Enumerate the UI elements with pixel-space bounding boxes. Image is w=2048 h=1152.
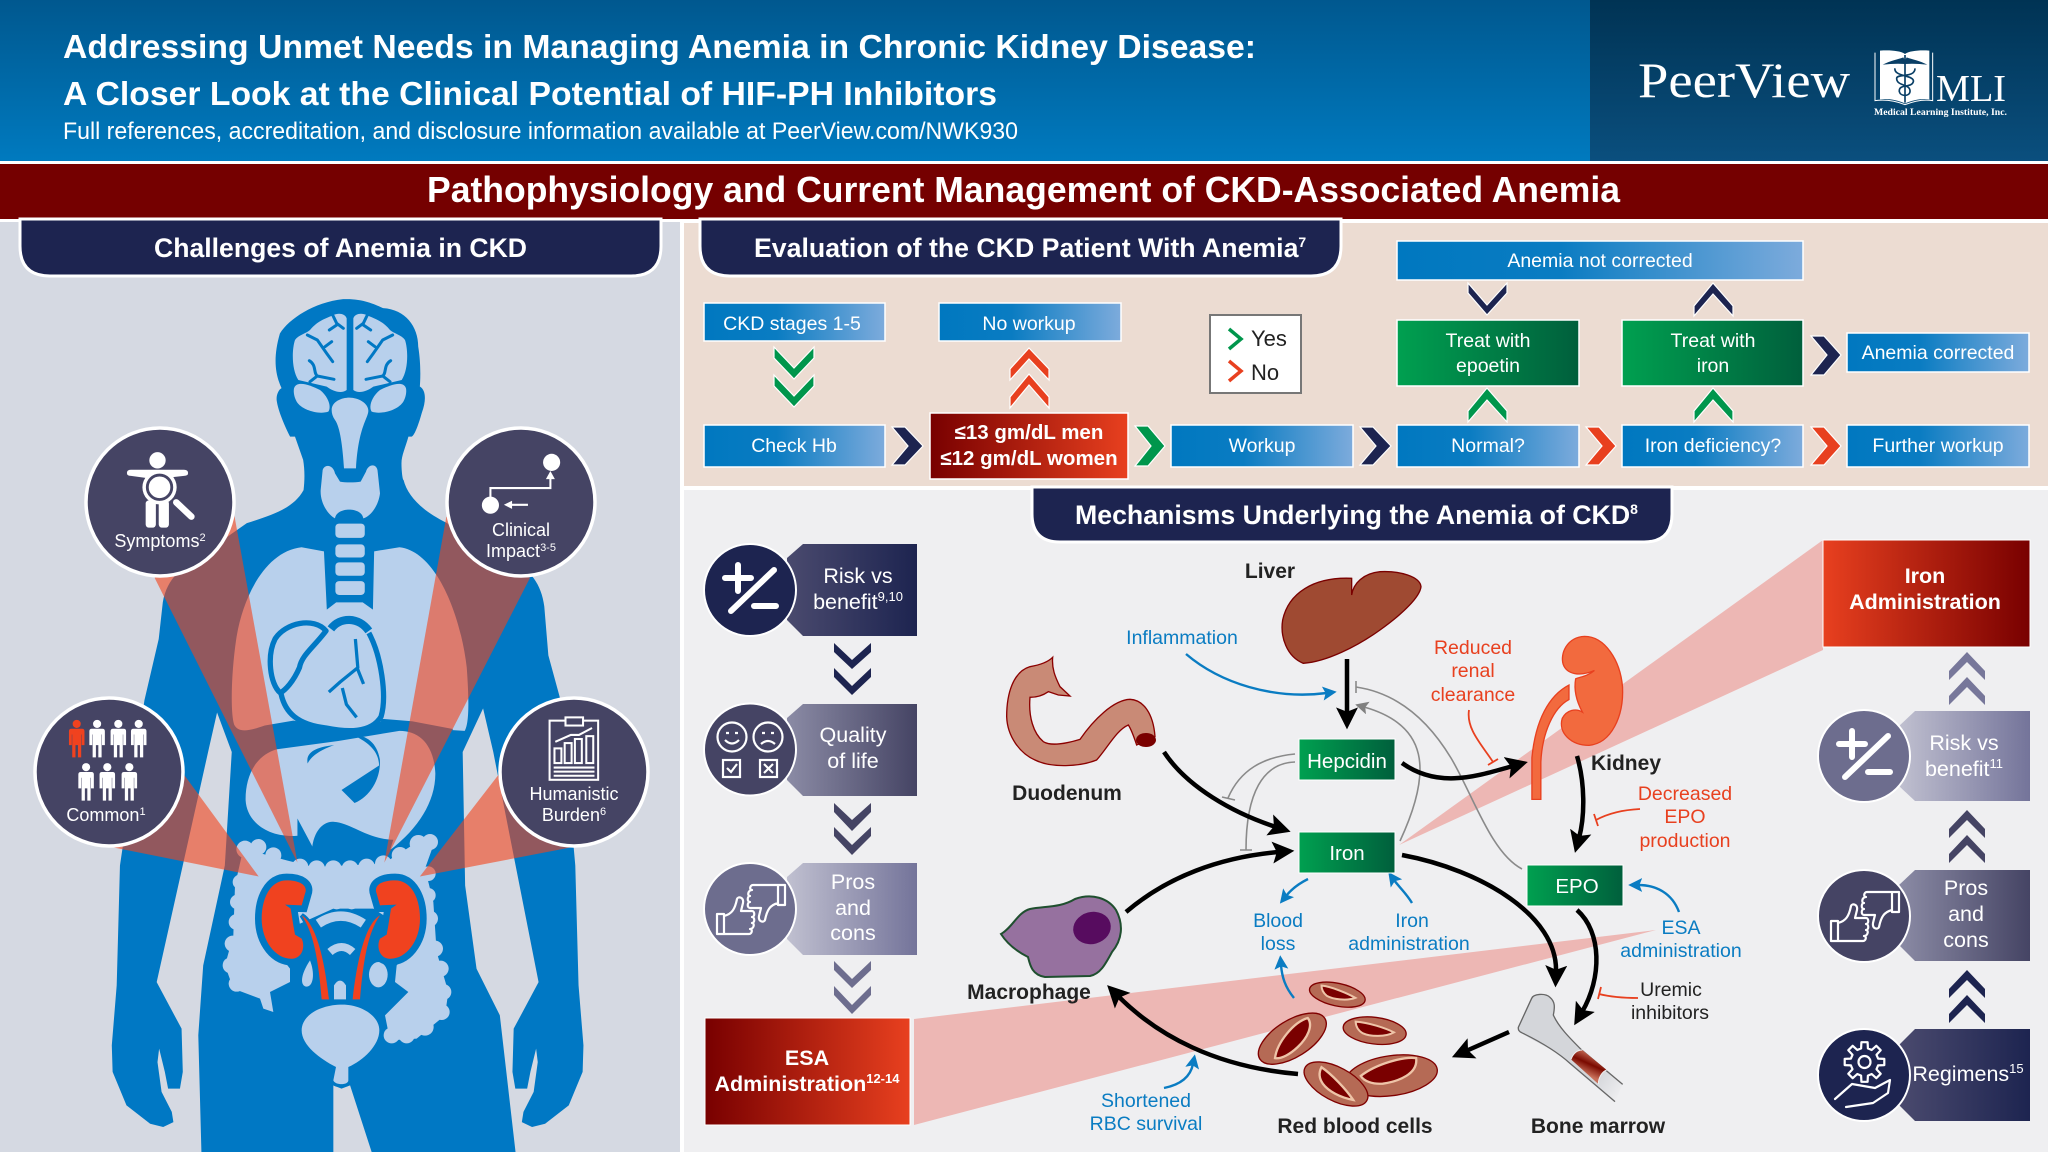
tag: regimens: 15 [2009, 1061, 2024, 1076]
box: CKD stages: CKD stages 1-5 [723, 313, 861, 335]
box: check Hb: Check Hb [751, 435, 837, 457]
box: anemia corrected: Anemia corrected [1862, 342, 2014, 364]
label: kidney: Kidney [1591, 752, 1661, 775]
tag: risk vs benefit [1899, 711, 2030, 801]
band: ESA administration [914, 930, 1656, 1125]
tag: risk vs benefit: Risk vs [823, 564, 893, 588]
heading: mechanisms: 8 [1630, 501, 1638, 517]
arrows: black pathways [1118, 659, 1596, 1074]
label: red blood cells: Red blood cells [1277, 1115, 1433, 1138]
section banner [0, 164, 2048, 219]
icon: gear and hand [1818, 1029, 1910, 1121]
box: iron deficiency [1622, 425, 1803, 467]
box: check Hb [704, 425, 885, 467]
box: workup [1171, 425, 1353, 467]
tag: regimens: Regimens [1912, 1062, 2009, 1086]
label: inflammation: Inflammation [1126, 627, 1238, 649]
arrow: chevrons [1949, 652, 1985, 705]
column: iron considerations [1818, 540, 2030, 1121]
label: Common [66, 805, 139, 825]
heading: evaluation: Evaluation of the CKD Patient With Anemia [754, 233, 1298, 263]
label: iron administration [1348, 910, 1470, 955]
heading: evaluation [700, 219, 1341, 276]
label: shortened RBC survival: RBC survival [1090, 1113, 1202, 1135]
box: iron administration [1823, 540, 2030, 647]
panel: evaluation background [684, 223, 2048, 486]
heading: mechanisms [1032, 487, 1672, 542]
body silhouette [112, 299, 583, 1152]
callout: humanistic burden: 6 [600, 806, 606, 818]
legend: yes and no [1210, 315, 1301, 393]
callout wedges to kidneys [112, 515, 577, 876]
red blood cells [1250, 978, 1440, 1115]
arrow: chevrons [834, 803, 871, 855]
label: macrophage: Macrophage [967, 981, 1091, 1004]
panel: challenges background [0, 222, 680, 1152]
label: bone marrow: Bone marrow [1531, 1115, 1666, 1138]
icon: thumbs [704, 863, 796, 955]
label: uremic inhibitors: inhibitors [1631, 1002, 1709, 1024]
label: ESA administration [1620, 917, 1742, 962]
box: anemia not corrected: Anemia not corrected [1507, 250, 1693, 272]
section title: Pathophysiology and Current Management of CKD-Associated Anemia [427, 169, 1621, 210]
box: anemia not corrected [1397, 241, 1803, 280]
box: CKD stages [704, 303, 885, 341]
tag: pros and cons: and [835, 896, 871, 920]
tag: pros and cons: and [1948, 902, 1984, 926]
left kidney [262, 880, 329, 999]
icon: pathway [482, 454, 560, 514]
tag: pros and cons [787, 863, 917, 955]
callout: humanistic burden [500, 698, 648, 846]
diagram: iron regulation [967, 560, 1742, 1138]
heading: evaluation: 7 [1298, 234, 1306, 250]
bone marrow [1518, 994, 1623, 1102]
tag: risk vs benefit: 11 [1990, 756, 2003, 771]
tag: quality of life [787, 704, 917, 796]
heading: mechanisms: Mechanisms Underlying the Anemia of CKD [1075, 500, 1630, 530]
header banner [0, 0, 2048, 161]
label: ESA administration: administration [1620, 940, 1742, 962]
box: treat with epoetin [1397, 320, 1579, 386]
band: iron administration [1399, 540, 1823, 845]
box: iron [1299, 832, 1395, 873]
inhibition lines: red [1469, 710, 1640, 999]
box: EPO: EPO [1555, 875, 1599, 898]
arrow: chevrons [834, 961, 871, 1014]
box: iron administration: Iron [1905, 564, 1945, 588]
label: shortened RBC survival: Shortened [1101, 1090, 1191, 1112]
lungs [232, 547, 468, 732]
organ: liver [1282, 572, 1421, 663]
label: reduced renal clearance: clearance [1431, 684, 1515, 706]
icon: plus minus [1818, 710, 1910, 802]
intestines and kidneys [223, 834, 451, 1084]
box: treat with iron: iron [1697, 355, 1729, 377]
tag: risk vs benefit: 9,10 [878, 589, 903, 604]
icon: thumbs [1818, 870, 1910, 962]
tag: pros and cons: cons [1943, 928, 1989, 952]
label: Humanistic [529, 784, 619, 804]
arrow: chevrons [1949, 970, 1985, 1023]
arrows: flow chevrons [774, 283, 1841, 466]
callout: humanistic burden: Burden [542, 805, 600, 825]
legend: yes and no: No [1251, 360, 1279, 385]
box: no workup [939, 303, 1121, 341]
box: treat with epoetin: epoetin [1456, 355, 1520, 377]
label: decreased EPO production [1638, 783, 1732, 852]
label: ESA administration: ESA [1661, 917, 1701, 939]
panel: mechanisms background [684, 490, 2048, 1152]
label: uremic inhibitors: Uremic [1640, 979, 1702, 1001]
icon: faces and checkboxes [704, 704, 796, 796]
box: EPO [1527, 865, 1623, 906]
flowchart: evaluation [704, 241, 2029, 479]
column: ESA considerations [704, 544, 917, 1125]
figure: body with organs [112, 299, 583, 1152]
legend: yes and no: Yes [1251, 326, 1287, 351]
box: no workup: No workup [982, 313, 1076, 335]
tag: regimens [1899, 1029, 2030, 1121]
box: ESA administration: 12-14 [866, 1071, 900, 1086]
heart [270, 620, 452, 731]
MLI logo book [1875, 50, 1933, 105]
callout: clinical impact: 3-5 [540, 542, 556, 554]
MLI tagline: Medical Learning Institute, Inc. [1874, 108, 2007, 118]
arrow: chevrons [834, 643, 871, 695]
box: workup: Workup [1229, 435, 1296, 457]
box: ESA administration: Administration [715, 1072, 866, 1096]
label: shortened RBC survival [1090, 1090, 1202, 1135]
box: anemia corrected [1847, 333, 2029, 372]
inhibition lines: gray [1222, 681, 1522, 869]
box: further workup: Further workup [1872, 435, 2004, 457]
label: iron administration: Iron [1395, 910, 1429, 932]
label: decreased EPO production: EPO [1664, 806, 1706, 828]
icon: plus minus [704, 544, 796, 636]
PeerView logo: PeerView [1638, 52, 1850, 108]
label: duodenum: Duodenum [1012, 782, 1122, 805]
tag: pros and cons [1899, 870, 2030, 961]
label: blood loss: loss [1261, 933, 1296, 955]
tag: risk vs benefit: Risk vs [1929, 731, 1999, 755]
title line 2: A Closer Look at the Clinical Potential of HIF-PH Inhibitors [63, 75, 997, 112]
box: ESA administration: ESA [785, 1046, 829, 1070]
right kidney [353, 880, 420, 999]
icon: people [69, 720, 146, 801]
box: hepcidin [1299, 739, 1395, 780]
tag: pros and cons: cons [830, 921, 876, 945]
box: iron administration: Administration [1849, 590, 2001, 614]
title line 1: Addressing Unmet Needs in Managing Anemia in Chronic Kidney Disease: [63, 28, 1256, 65]
box: hemoglobin thresholds: ≤12 gm/dL women [940, 447, 1118, 470]
box: normal: Normal? [1451, 435, 1525, 457]
label: reduced renal clearance [1431, 637, 1515, 706]
callout: clinical impact: Impact [486, 541, 540, 561]
box: iron: Iron [1329, 842, 1365, 865]
stomach and liver [246, 731, 435, 849]
MLI wordmark: MLI [1936, 68, 2006, 110]
label: blood loss: Blood [1253, 910, 1303, 932]
box: treat with iron [1622, 320, 1803, 386]
label: liver: Liver [1245, 560, 1295, 583]
tag: risk vs benefit [787, 544, 917, 636]
organ: kidney [1532, 636, 1623, 799]
box: treat with iron: Treat with [1671, 330, 1755, 352]
icon: person with magnifier [127, 452, 191, 528]
tag: pros and cons: Pros [1944, 876, 1988, 900]
label: Symptoms [114, 531, 199, 551]
heading: challenges: Challenges of Anemia in CKD [154, 233, 527, 263]
box: iron deficiency: Iron deficiency? [1645, 435, 1781, 457]
brain and thyroid [293, 314, 407, 518]
icon: clipboard chart [550, 717, 598, 780]
label: decreased EPO production: production [1639, 830, 1731, 852]
arrows: blue modifiers [1164, 654, 1679, 1088]
callout: symptoms [86, 428, 234, 576]
label: reduced renal clearance: renal [1451, 660, 1495, 682]
cell: macrophage [1001, 896, 1121, 977]
label: uremic inhibitors [1631, 979, 1709, 1024]
tag: quality of life: Quality [820, 723, 887, 747]
label: 2 [199, 532, 206, 544]
bladder [302, 1005, 379, 1084]
callout: common [35, 698, 183, 846]
tag: risk vs benefit: benefit [813, 590, 878, 614]
callout: clinical impact [447, 428, 595, 576]
label: 1 [139, 806, 146, 818]
tag: pros and cons: Pros [831, 870, 875, 894]
box: ESA administration [705, 1018, 910, 1125]
subtitle: Full references, accreditation, and disclosure information available at PeerView.com/NWK930 [63, 118, 1018, 145]
box: hepcidin: Hepcidin [1307, 750, 1387, 773]
box: further workup [1847, 425, 2029, 467]
organ: duodenum [1007, 657, 1156, 766]
label: iron administration: administration [1348, 933, 1470, 955]
trachea rings [335, 524, 365, 595]
box: treat with epoetin: Treat with [1446, 330, 1530, 352]
tag: risk vs benefit: benefit [1925, 757, 1990, 781]
box: hemoglobin thresholds: ≤13 gm/dL men [955, 421, 1103, 444]
label: reduced renal clearance: Reduced [1434, 637, 1512, 659]
heading: challenges [20, 219, 661, 276]
label: blood loss [1253, 910, 1303, 955]
arrow: chevrons [1949, 810, 1985, 863]
label: Clinical [492, 520, 550, 540]
tag: quality of life: of life [827, 749, 879, 773]
box: hemoglobin thresholds [930, 413, 1128, 479]
box: normal [1397, 425, 1579, 467]
label: decreased EPO production: Decreased [1638, 783, 1732, 805]
